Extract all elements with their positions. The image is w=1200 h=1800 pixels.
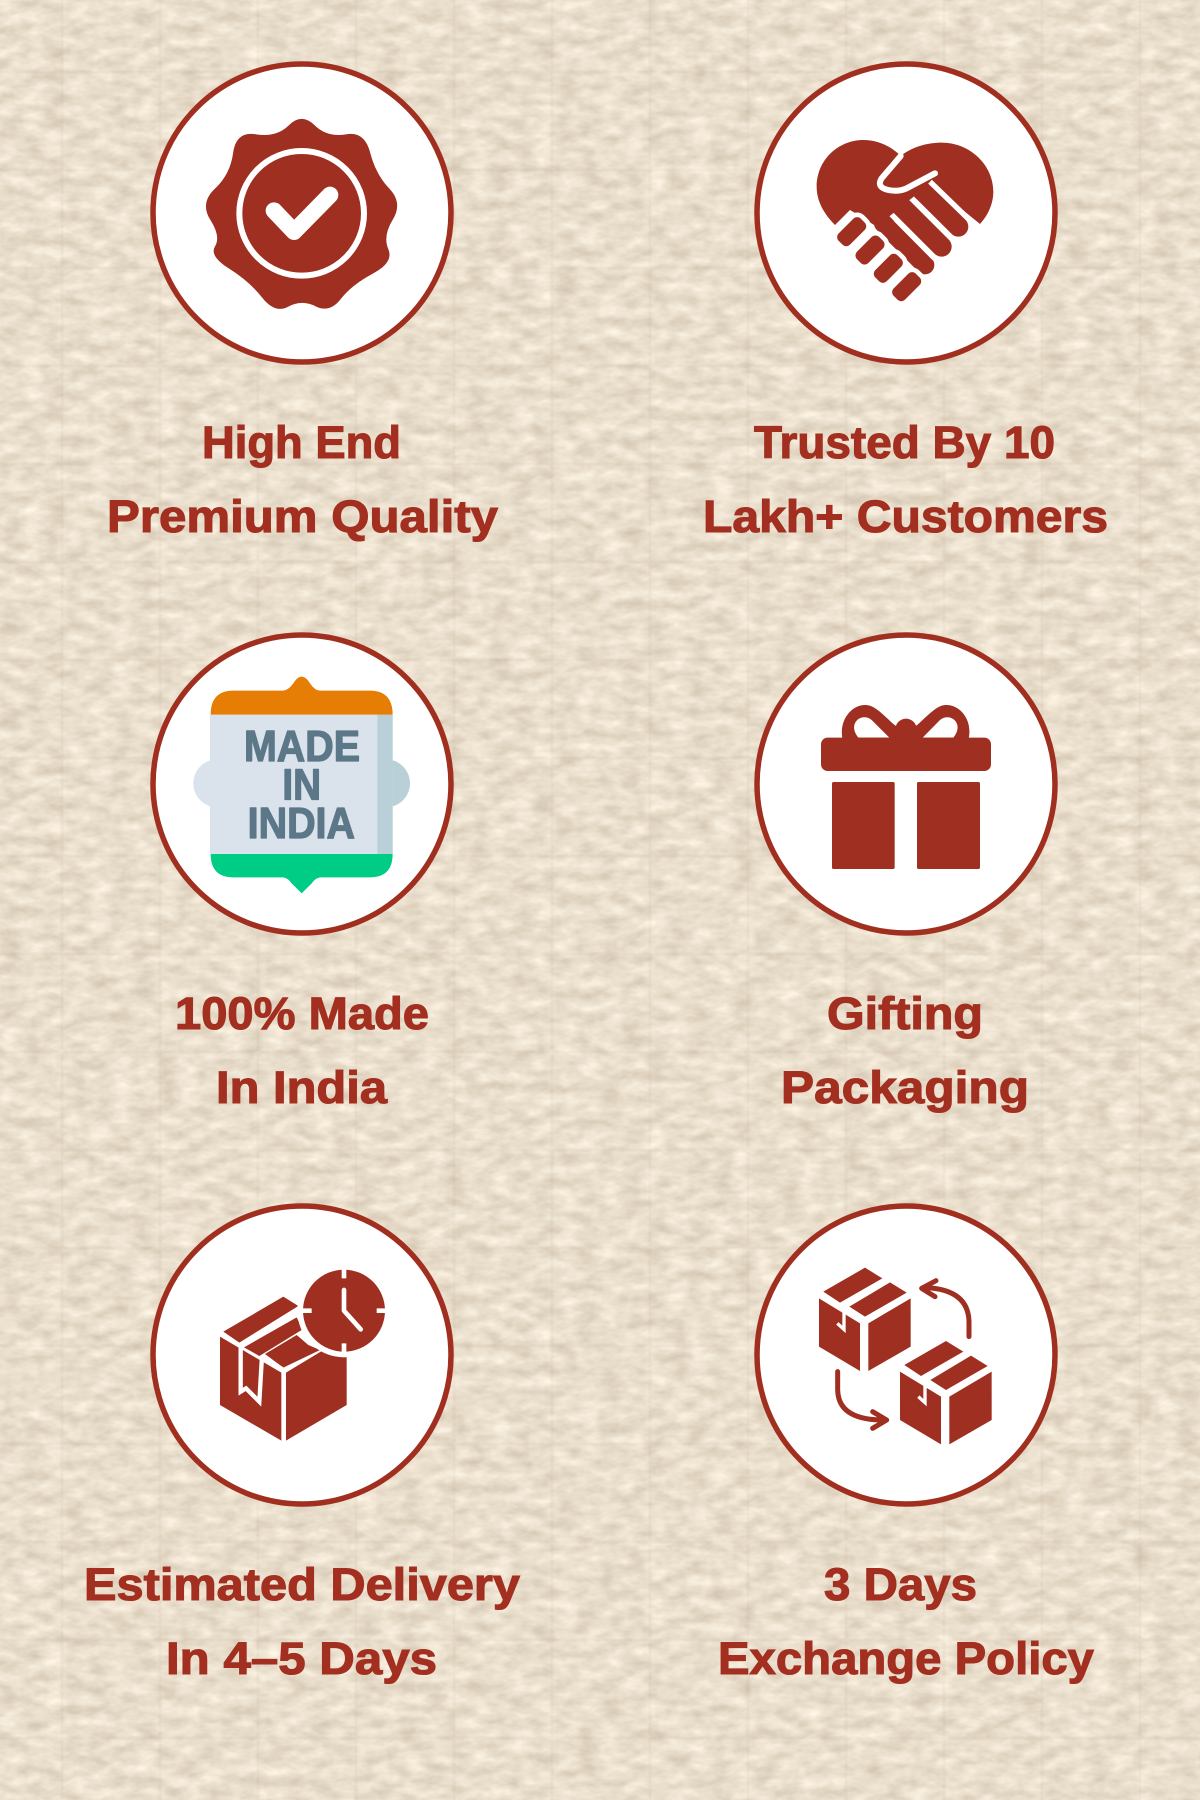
icon circle: exchange boxes (757, 1206, 1055, 1504)
icon circle: box with clock (153, 1206, 451, 1504)
icon circle: made in india badge: MADE (244, 722, 360, 771)
panel: exchange policy (718, 1206, 1094, 1684)
panel: gifting packaging (757, 635, 1055, 1113)
icon circle: gift box (757, 635, 1055, 933)
label: estimated delivery in 4-5 days (84, 1559, 520, 1684)
panel: made in india (153, 635, 451, 1113)
label: 3 days exchange policy (718, 1559, 1094, 1684)
label: estimated delivery in 4-5 days: Estimated Delivery (84, 1559, 520, 1610)
label: 3 days exchange policy: Exchange Policy (718, 1633, 1094, 1684)
label: estimated delivery in 4-5 days: In 4–5 Days (166, 1633, 437, 1684)
label: 100% made in india: 100% Made (175, 988, 429, 1039)
label: high end premium quality: Premium Quality (107, 491, 498, 542)
icon circle: heart handshake (757, 64, 1055, 362)
label: gifting packaging: Packaging (781, 1062, 1029, 1113)
icon circle: made in india badge (153, 635, 451, 933)
label: 100% made in india (175, 988, 429, 1113)
panel: trusted by customers (703, 64, 1108, 542)
icon circle: quality badge (153, 64, 451, 362)
panel: estimated delivery (84, 1206, 520, 1684)
label: gifting packaging (781, 988, 1029, 1113)
label: gifting packaging: Gifting (827, 988, 983, 1039)
label: 3 days exchange policy: 3 Days (824, 1559, 977, 1610)
panel: high end premium quality (107, 64, 498, 542)
label: trusted by 10 lakh+ customers (703, 417, 1108, 542)
label: high end premium quality (107, 417, 498, 542)
label: trusted by 10 lakh+ customers: Trusted By 10 (754, 417, 1055, 468)
label: high end premium quality: High End (202, 417, 401, 468)
icon circle: made in india badge: IN (282, 761, 321, 810)
label: 100% made in india: In India (216, 1062, 388, 1113)
label: trusted by 10 lakh+ customers: Lakh+ Customers (703, 491, 1108, 542)
icon circle: made in india badge: INDIA (248, 799, 355, 848)
